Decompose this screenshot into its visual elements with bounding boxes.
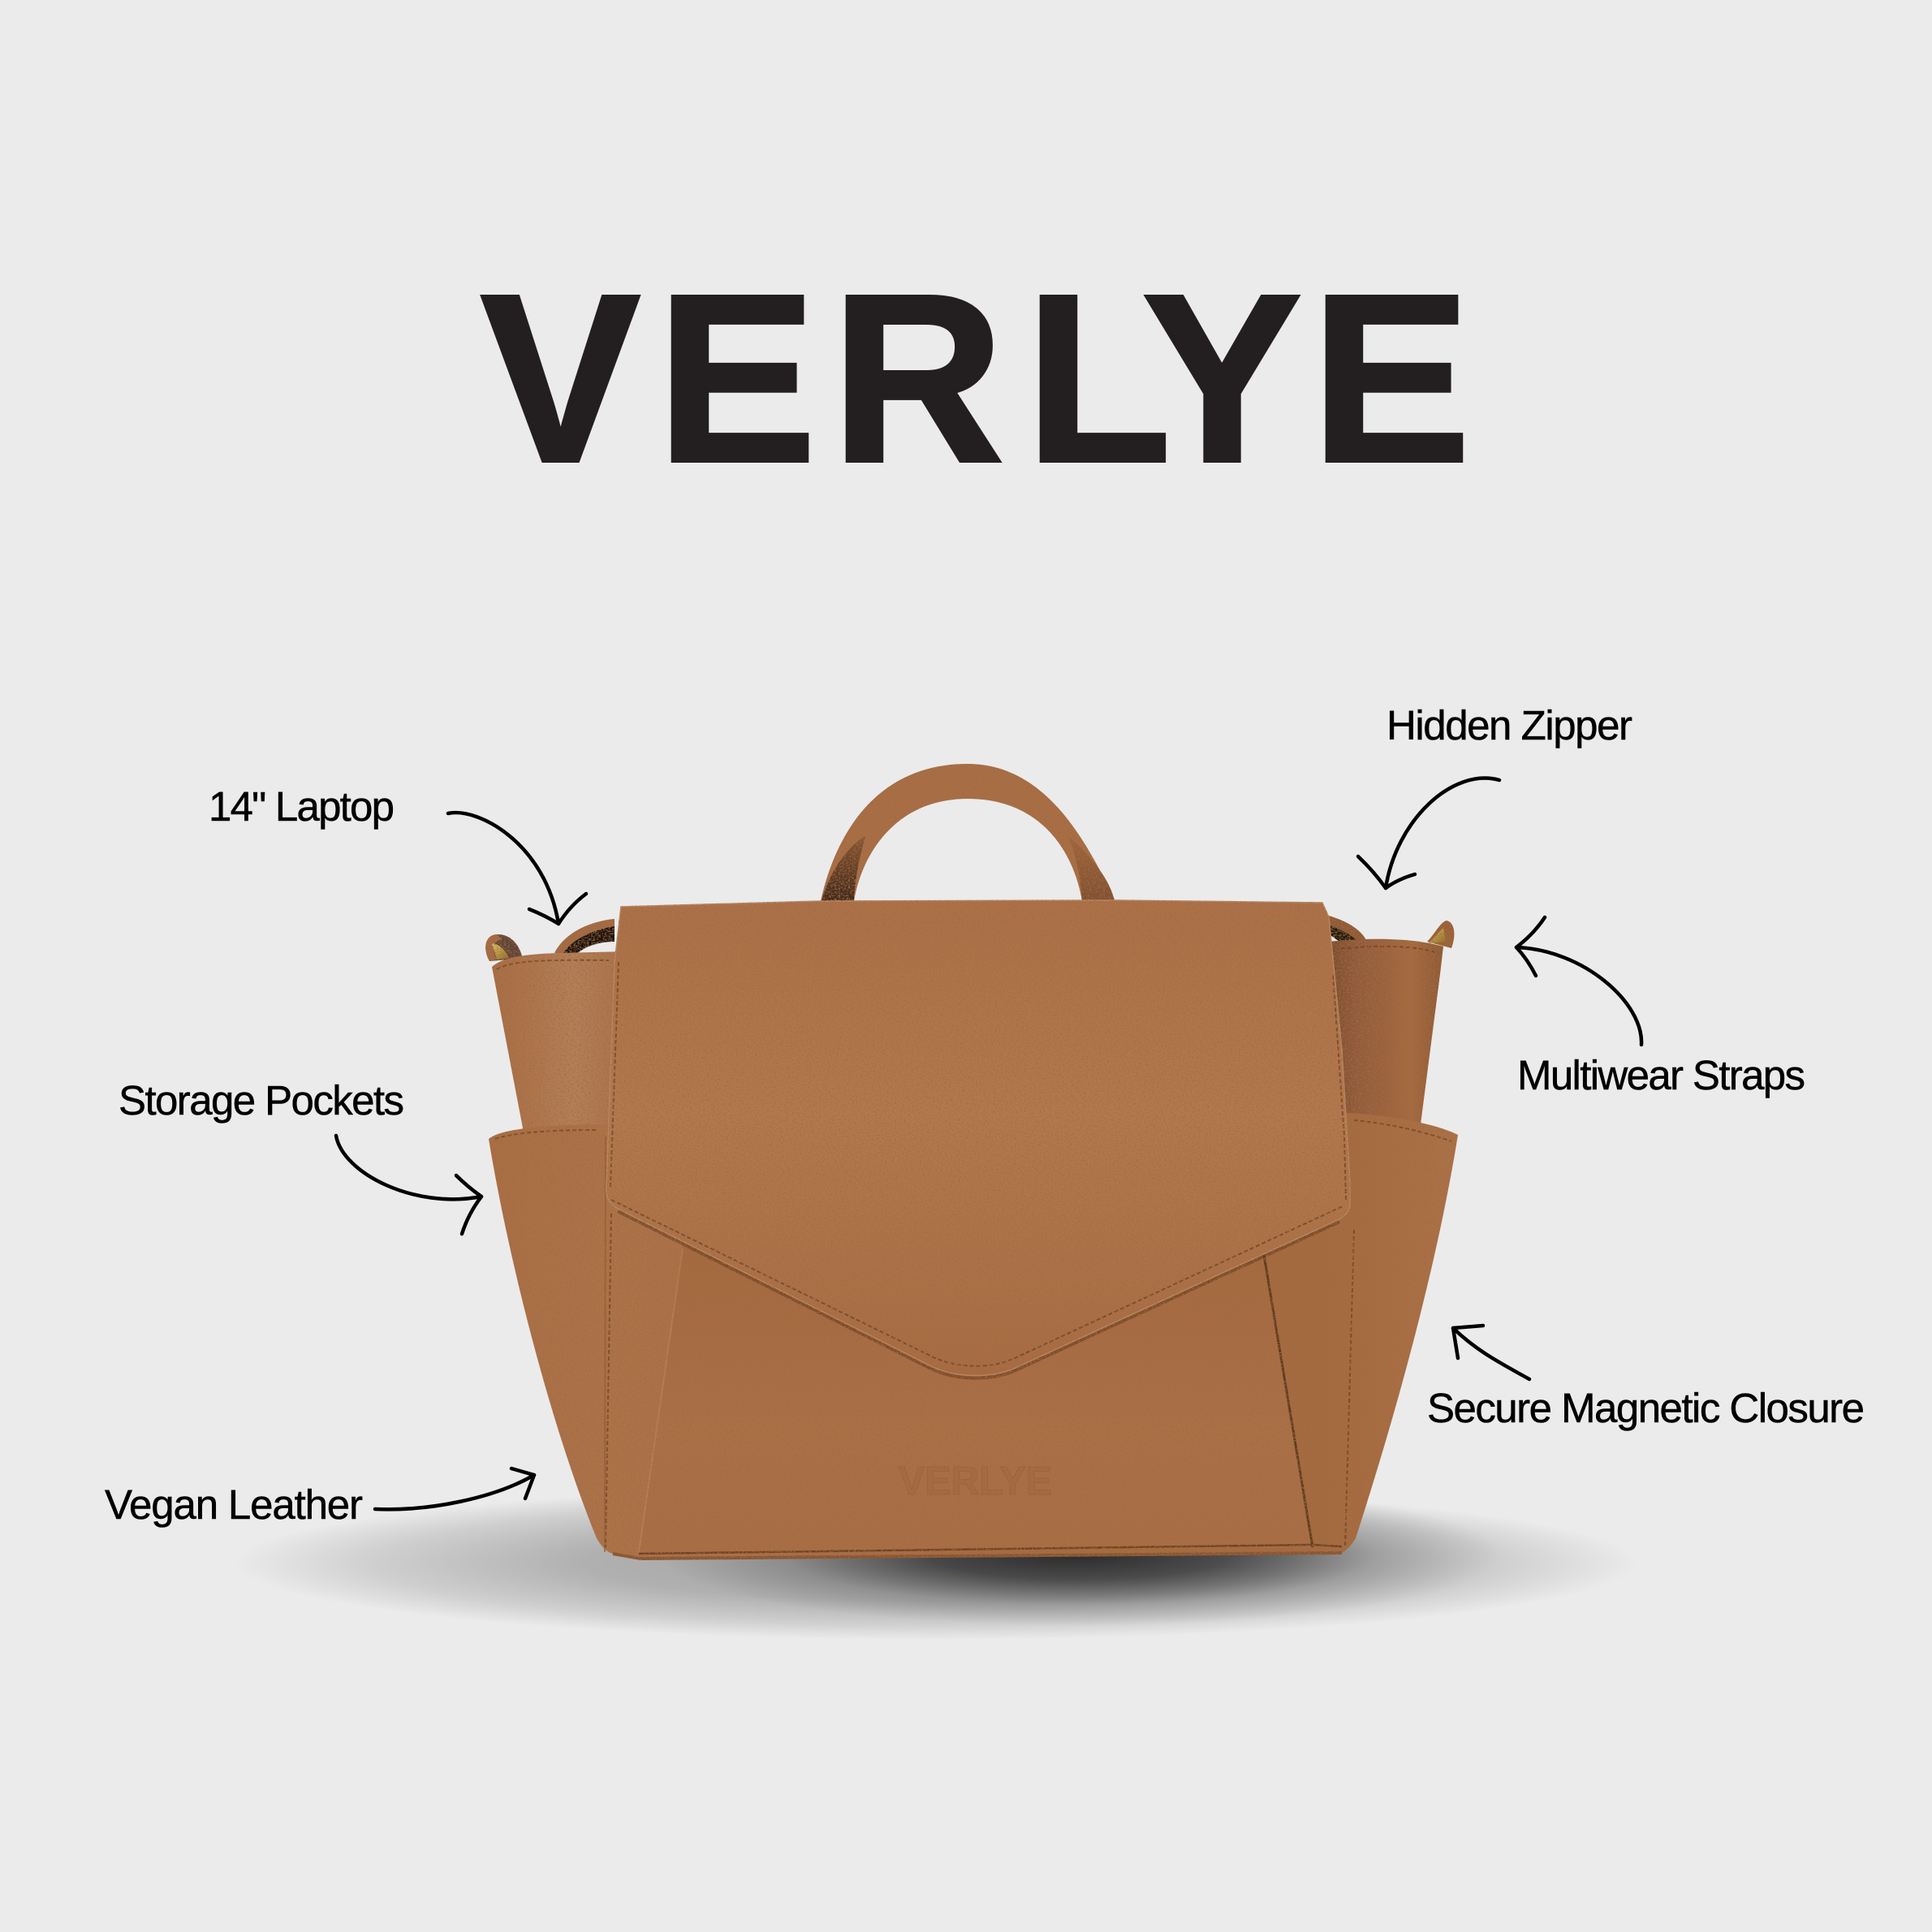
top handle <box>821 764 1115 901</box>
shadow under flap edge <box>618 1211 1339 1378</box>
right strap loop and gold ring <box>1427 921 1454 948</box>
arrow: 14" Laptop <box>448 813 586 924</box>
embossed logo on bag: VERLYE <box>899 1460 1052 1503</box>
ground shadow <box>234 1483 1638 1640</box>
left strap loop and gold ring <box>485 934 522 961</box>
label: Vegan Leather: Vegan Leather <box>105 1481 363 1528</box>
label: Hidden Zipper: Hidden Zipper <box>1386 702 1632 748</box>
main body with lower pockets <box>489 1113 1458 1559</box>
front flap <box>606 900 1350 1376</box>
left side strap <box>554 919 615 953</box>
arrow: Hidden Zipper <box>1358 778 1499 888</box>
arrow: Vegan Leather <box>375 1468 534 1509</box>
upper right pocket <box>1315 939 1443 1124</box>
arrow: Multiwear Straps <box>1516 917 1641 1045</box>
label: Storage Pockets: Storage Pockets <box>119 1077 404 1123</box>
title: brand logo: VERLYE <box>481 244 1471 512</box>
right side strap <box>1329 916 1366 942</box>
bag photo illustration <box>485 764 1458 1559</box>
arrow: Secure Magnetic Closure <box>1453 1326 1529 1379</box>
label: Multiwear Straps: Multiwear Straps <box>1517 1052 1805 1098</box>
front panel <box>605 1136 1354 1559</box>
upper left pocket <box>492 951 629 1138</box>
arrow: Storage Pockets <box>336 1136 481 1234</box>
label: Secure Magnetic Closure: Secure Magnetic Closure <box>1427 1385 1865 1431</box>
label: 14" Laptop: 14" Laptop <box>209 783 395 830</box>
